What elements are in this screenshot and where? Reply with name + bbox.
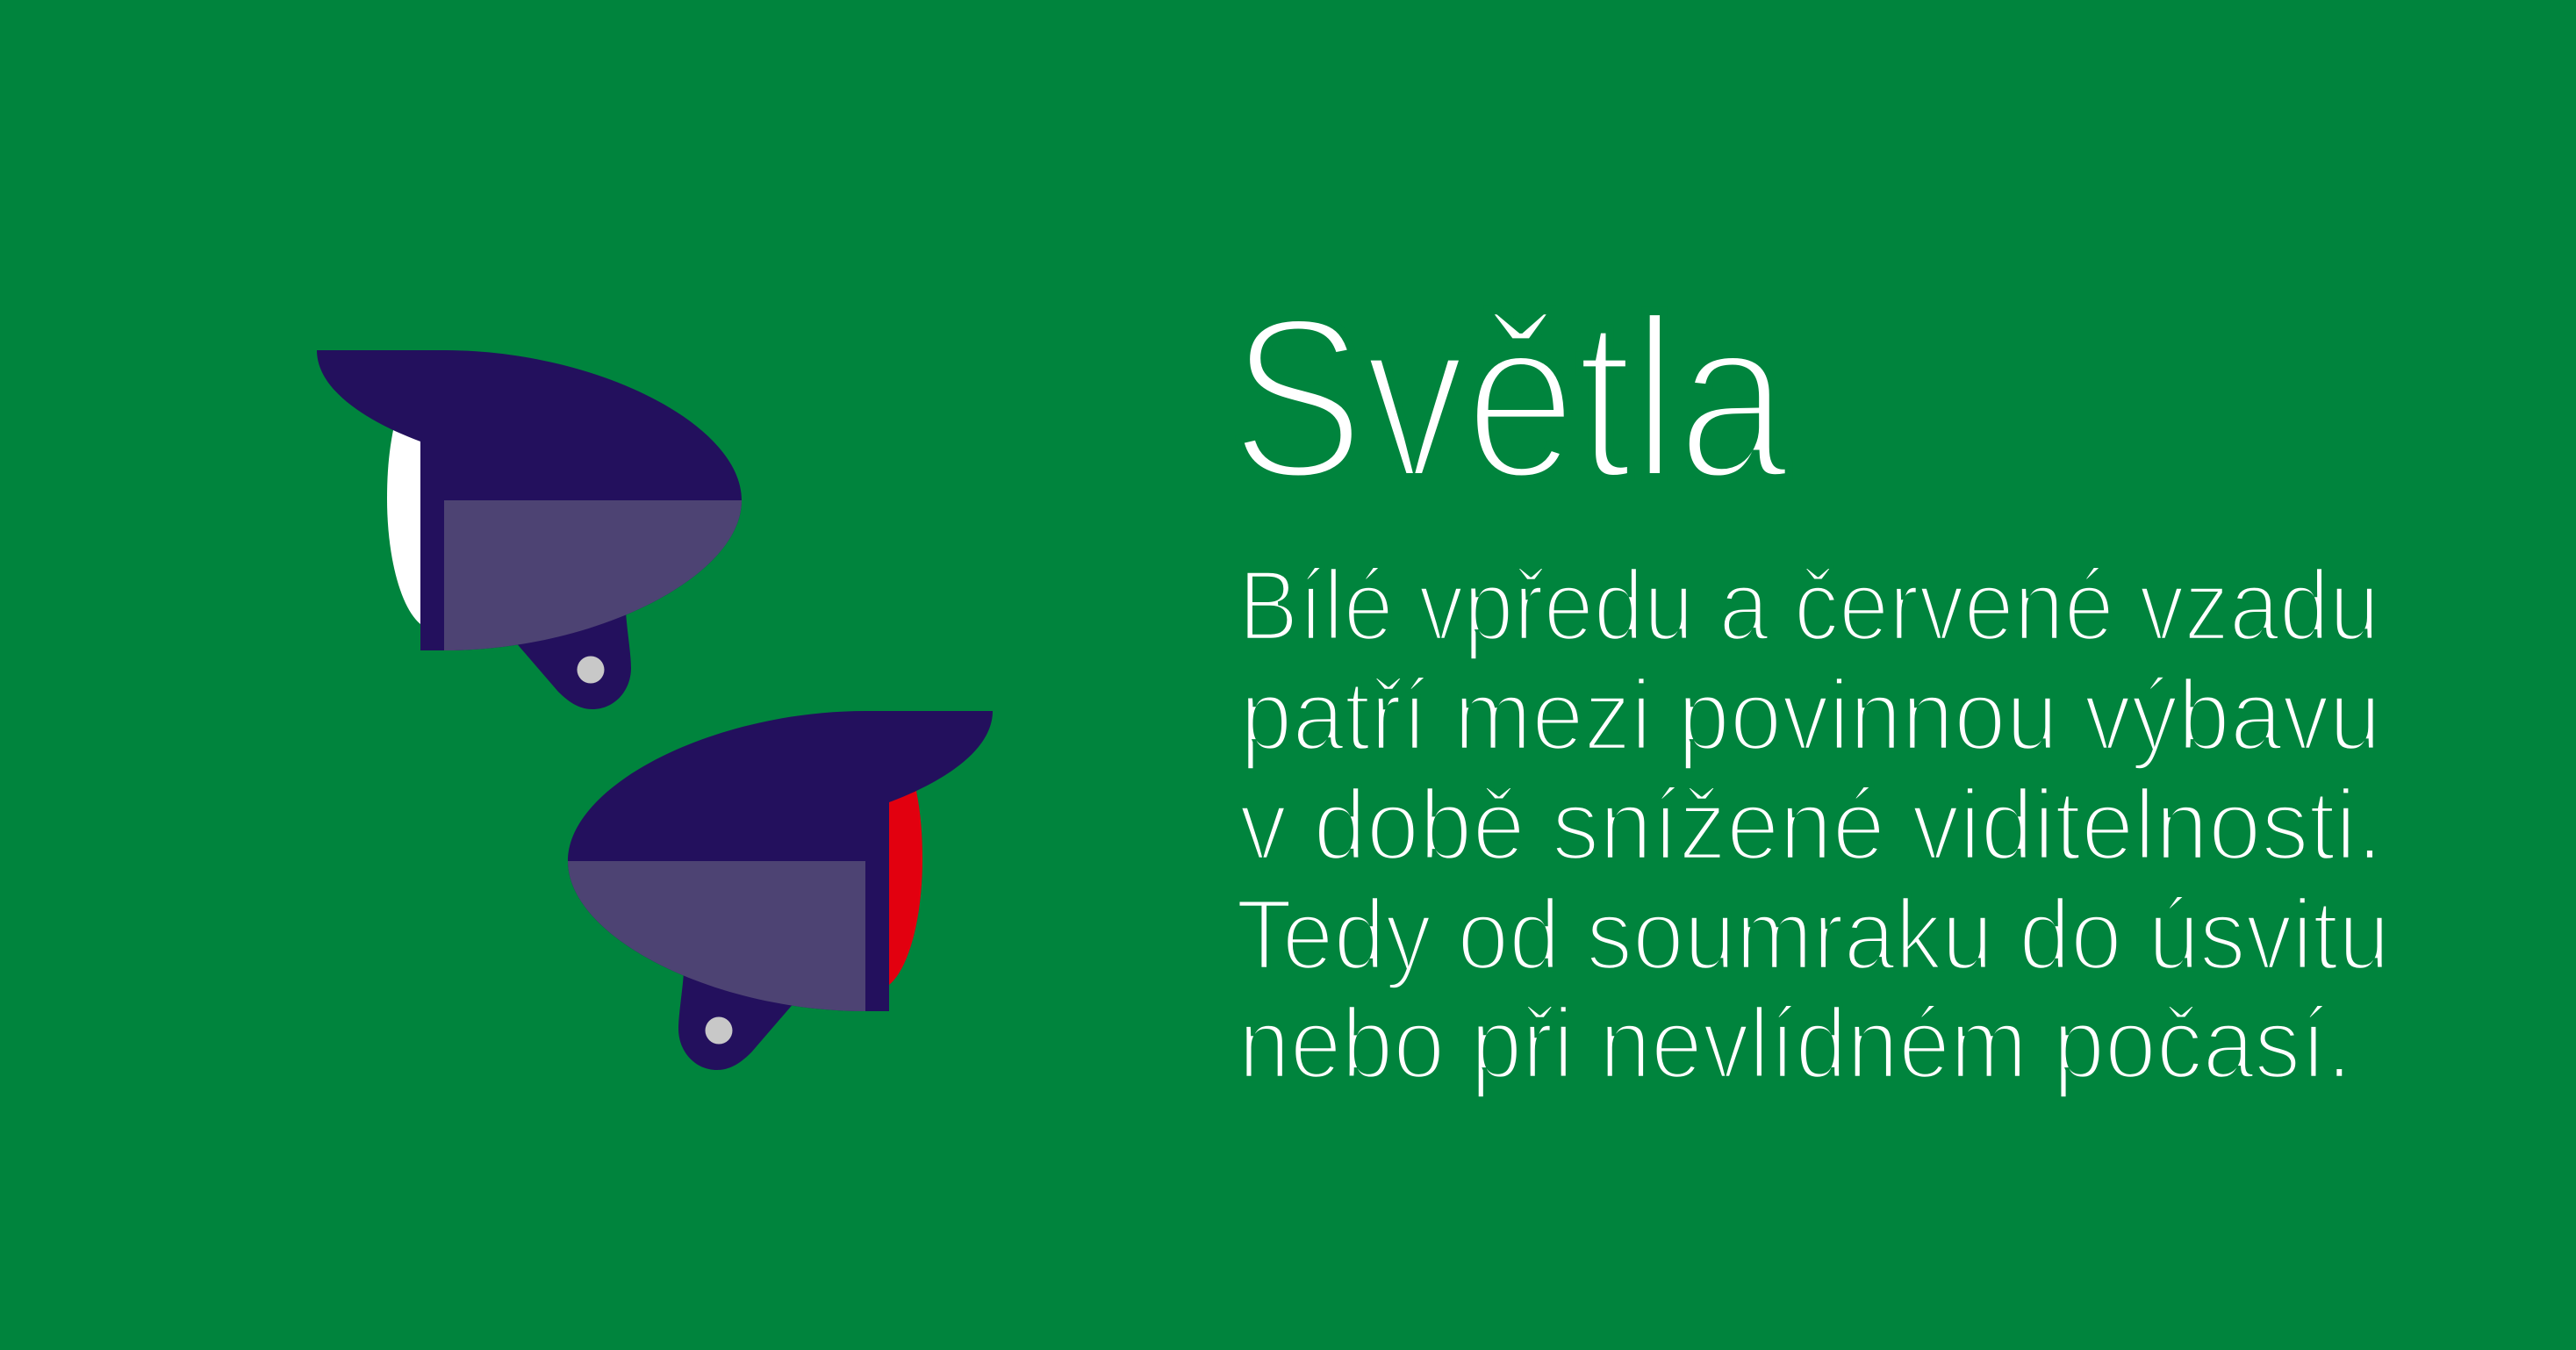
body text — [1236, 550, 2390, 1100]
body highlight — [444, 500, 742, 650]
mounting lug — [678, 972, 795, 1070]
white lens — [387, 430, 430, 624]
icon: red rear bicycle light — [568, 711, 993, 1070]
line 1: Bílé vpředu a červené vzadu — [1238, 550, 2379, 662]
line 3: v době snížené viditelnosti. — [1239, 770, 2383, 881]
light body — [568, 711, 993, 1011]
line 5: nebo při nevlídném počasí. — [1238, 988, 2352, 1100]
icon: white front bicycle light — [317, 350, 742, 709]
mounting lug — [514, 611, 631, 709]
light body — [317, 350, 742, 650]
body highlight — [568, 861, 865, 1011]
red lens — [879, 791, 922, 985]
bolt — [578, 657, 604, 683]
line 2: patří mezi povinnou výbavu — [1240, 660, 2381, 772]
title: Světla — [1231, 269, 1790, 527]
line 4: Tedy od soumraku do úsvitu — [1236, 880, 2390, 991]
bolt — [706, 1016, 732, 1045]
